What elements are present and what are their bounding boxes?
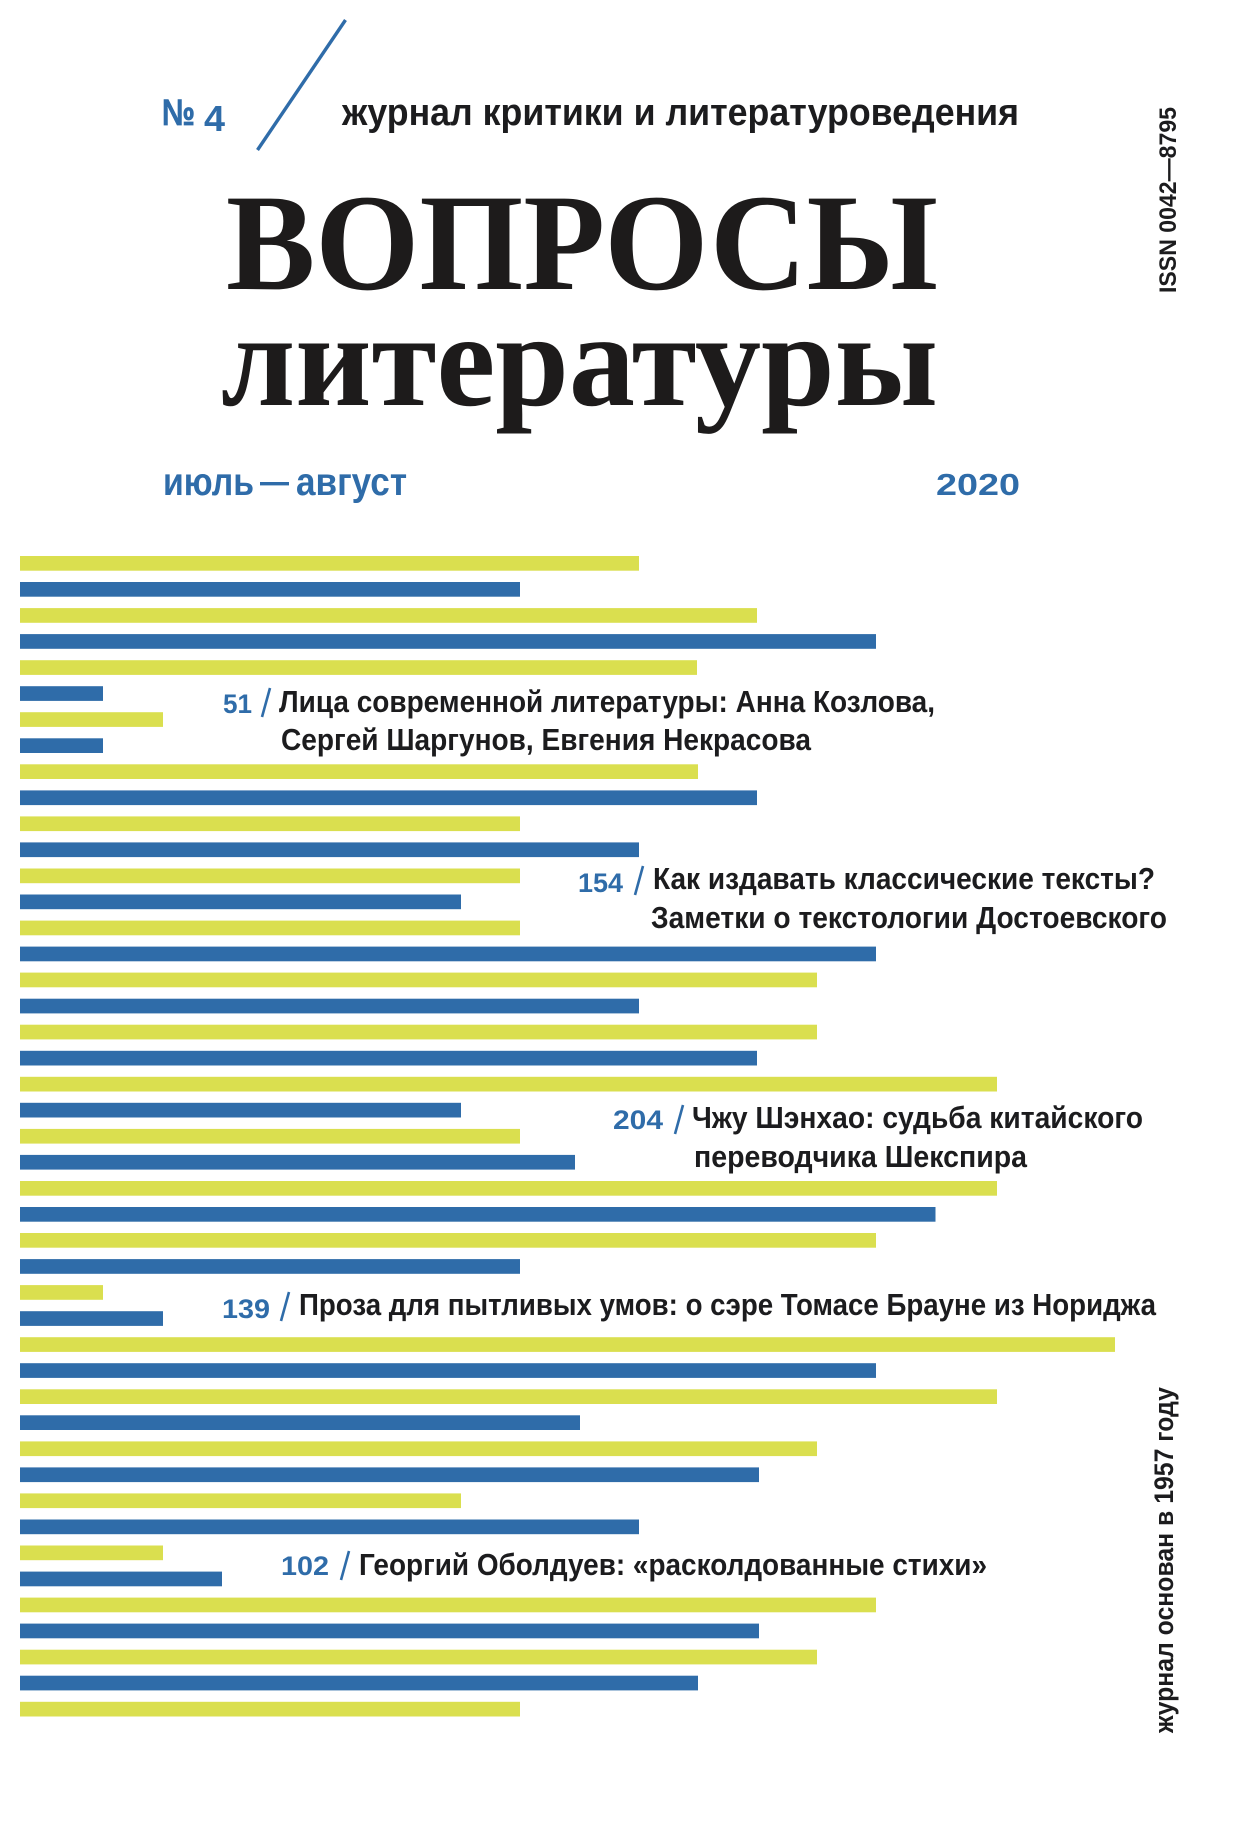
issue months bbox=[163, 461, 407, 504]
article: page 154: Как издавать классические тексты? bbox=[653, 861, 1155, 896]
article: page 204: 204 bbox=[613, 1105, 663, 1135]
article: page 204: Чжу Шэнхао: судьба китайского bbox=[692, 1100, 1143, 1135]
article: page 139: 139 bbox=[222, 1294, 270, 1324]
article: page 51 bbox=[223, 684, 935, 757]
article: page 51: Лица современной литературы: Анна Козлова, bbox=[279, 684, 935, 719]
article: page 102: Георгий Оболдуев: «расколдованные стихи» bbox=[359, 1547, 987, 1582]
article: page 204 bbox=[613, 1100, 1143, 1174]
year: 2020 bbox=[936, 467, 1020, 502]
article: page 154: 154 bbox=[578, 868, 623, 898]
masthead line 1: ВОПРОСЫ bbox=[226, 166, 938, 319]
article: page 51: 51 bbox=[223, 689, 252, 719]
article: page 139: Проза для пытливых умов: о сэре Томасе Брауне из Нориджа bbox=[299, 1287, 1157, 1322]
issue months: август bbox=[296, 461, 407, 504]
article: page 154 bbox=[578, 861, 1167, 935]
issue number bbox=[162, 92, 225, 139]
issue number: № bbox=[162, 92, 195, 133]
founded note vertical: журнал основан в 1957 году bbox=[1149, 1387, 1179, 1734]
issue number: 4 bbox=[204, 98, 225, 139]
article: page 51: Сергей Шаргунов, Евгения Некрасова bbox=[281, 722, 812, 757]
subtitle: журнал критики и литературоведения bbox=[341, 92, 1019, 134]
diagonal slash bbox=[258, 20, 346, 150]
article: page 102: 102 bbox=[281, 1551, 329, 1581]
article: page 204: переводчика Шекспира bbox=[694, 1139, 1028, 1174]
ISSN vertical: ISSN 0042—8795 bbox=[1155, 107, 1182, 293]
striped bar chart bbox=[20, 556, 1115, 1716]
article: page 154: Заметки о текстологии Достоевского bbox=[651, 900, 1167, 935]
masthead line 2: литературы bbox=[221, 286, 938, 434]
issue months: июль bbox=[163, 461, 254, 504]
